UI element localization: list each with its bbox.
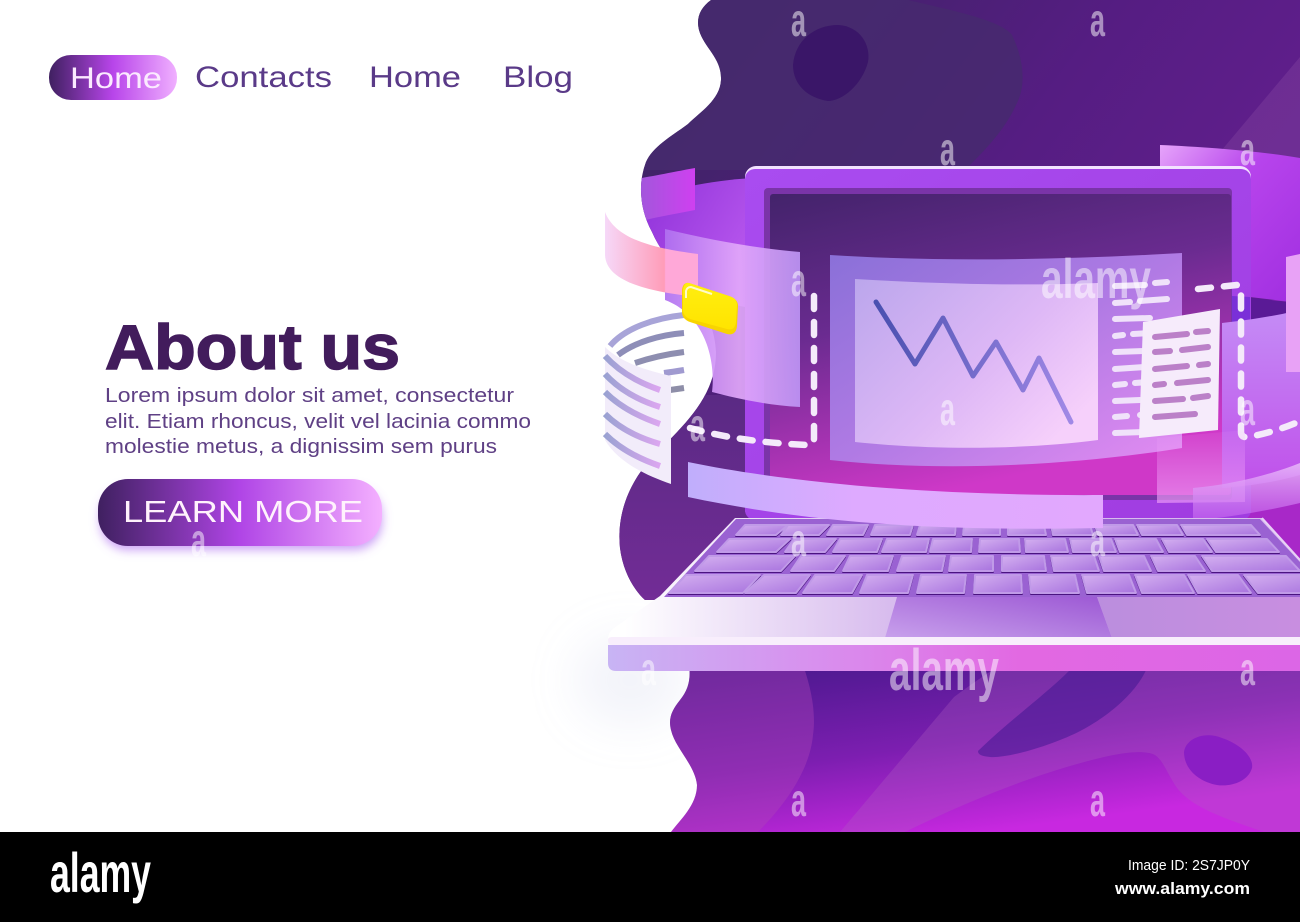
background soft shape: top swoosh	[640, 0, 1023, 170]
watermarks: a	[940, 123, 955, 175]
keys: row 4	[669, 575, 1300, 593]
ring: front band right	[1222, 310, 1300, 488]
keyboard deck	[608, 518, 1300, 671]
navigation	[49, 55, 573, 100]
lower soft shape: dark wedge	[978, 670, 1146, 757]
footer bar	[0, 832, 1300, 922]
dashed connector left	[690, 296, 814, 445]
document card	[1139, 309, 1220, 438]
button: learn more: LEARN MORE	[123, 494, 363, 529]
keyboard well	[664, 519, 1300, 597]
translucent panel left	[665, 229, 800, 407]
soft shadow beneath laptop	[575, 635, 685, 725]
document stack on left ring	[605, 315, 684, 484]
background soft shape: top right diagonal	[1205, 57, 1300, 170]
laptop lid	[745, 166, 1251, 520]
laptop	[605, 145, 1300, 520]
chart panel	[830, 253, 1182, 466]
background blob spot: top	[793, 25, 868, 101]
declining line chart	[876, 302, 1071, 422]
watermarks: a	[1090, 514, 1105, 566]
text lines on chart panel	[1115, 282, 1167, 433]
watermarks: a	[1240, 383, 1255, 435]
right edge panel	[1286, 254, 1300, 372]
body text	[105, 384, 531, 458]
watermarks: a	[641, 643, 656, 695]
translucent band lower right	[1157, 430, 1245, 503]
watermarks: a	[940, 383, 955, 435]
button: learn more	[98, 479, 382, 550]
curved stripes: back	[610, 315, 684, 390]
watermarks	[191, 0, 1255, 826]
yellow folder tab	[682, 283, 738, 334]
nav: Contacts: Contacts	[195, 61, 332, 94]
chart card	[855, 279, 1098, 448]
background blob spot: bottom	[1184, 735, 1252, 785]
keys: row 2	[717, 539, 1279, 552]
body text: elit. Etiam rhoncus, velit vel lacinia commo	[105, 410, 531, 433]
nav: Blog: Blog	[503, 61, 573, 94]
keys: row 3	[695, 556, 1300, 571]
watermarks: a	[690, 399, 705, 451]
heading: About us: About us	[105, 313, 400, 383]
ring: dark gap right	[1215, 294, 1300, 326]
watermarks: a	[1240, 123, 1255, 175]
watermarks: alamy	[889, 638, 999, 703]
front edge	[608, 645, 1300, 671]
nav: Home: Home	[369, 61, 461, 94]
dashed connector right	[1198, 285, 1300, 437]
translucent band right	[1193, 463, 1300, 520]
watermarks: a	[1090, 774, 1105, 826]
deck right edge highlight	[1262, 518, 1300, 560]
ring: dark gap over lid edge	[1232, 296, 1250, 322]
ring piece: pink	[605, 212, 698, 297]
deck right palm rest	[1097, 597, 1300, 638]
body text: Lorem ipsum dolor sit amet, consectetur	[105, 384, 514, 407]
watermarks: alamy	[1041, 247, 1151, 310]
lower left fill	[619, 395, 748, 600]
front card stripes	[605, 356, 660, 466]
background blob: lower purple	[670, 665, 1300, 832]
ring: back band right	[1160, 145, 1300, 303]
screen frame	[764, 188, 1232, 500]
footer url: www.alamy.com	[1114, 879, 1250, 898]
band in front of screen	[688, 462, 1103, 529]
deck body	[608, 518, 1300, 640]
footer image id: Image ID: 2S7JP0Y	[1128, 857, 1250, 874]
watermarks: a	[791, 514, 806, 566]
background blob: upper purple	[600, 0, 1300, 600]
lower soft shape: diagonal	[840, 665, 1300, 832]
right side fill	[1232, 300, 1300, 600]
front card	[605, 347, 671, 484]
trackpad	[885, 597, 1112, 638]
nav pill: Home	[49, 55, 177, 100]
watermarks: a	[791, 254, 806, 306]
front edge highlight	[608, 637, 1300, 645]
ring piece: top-left magenta	[641, 168, 695, 220]
ring: back band left	[642, 178, 745, 307]
footer logo: alamy	[50, 841, 151, 904]
watermarks: a	[791, 774, 806, 826]
watermarks: a	[191, 514, 206, 566]
document lines	[1155, 331, 1208, 417]
keys: row 1	[736, 525, 1260, 535]
body text: molestie metus, a dignissim sem purus	[105, 435, 497, 458]
watermarks: a	[1240, 643, 1255, 695]
nav pill: Home: Home	[70, 62, 162, 95]
lower soft shape: left	[670, 665, 814, 832]
screen	[770, 194, 1231, 495]
